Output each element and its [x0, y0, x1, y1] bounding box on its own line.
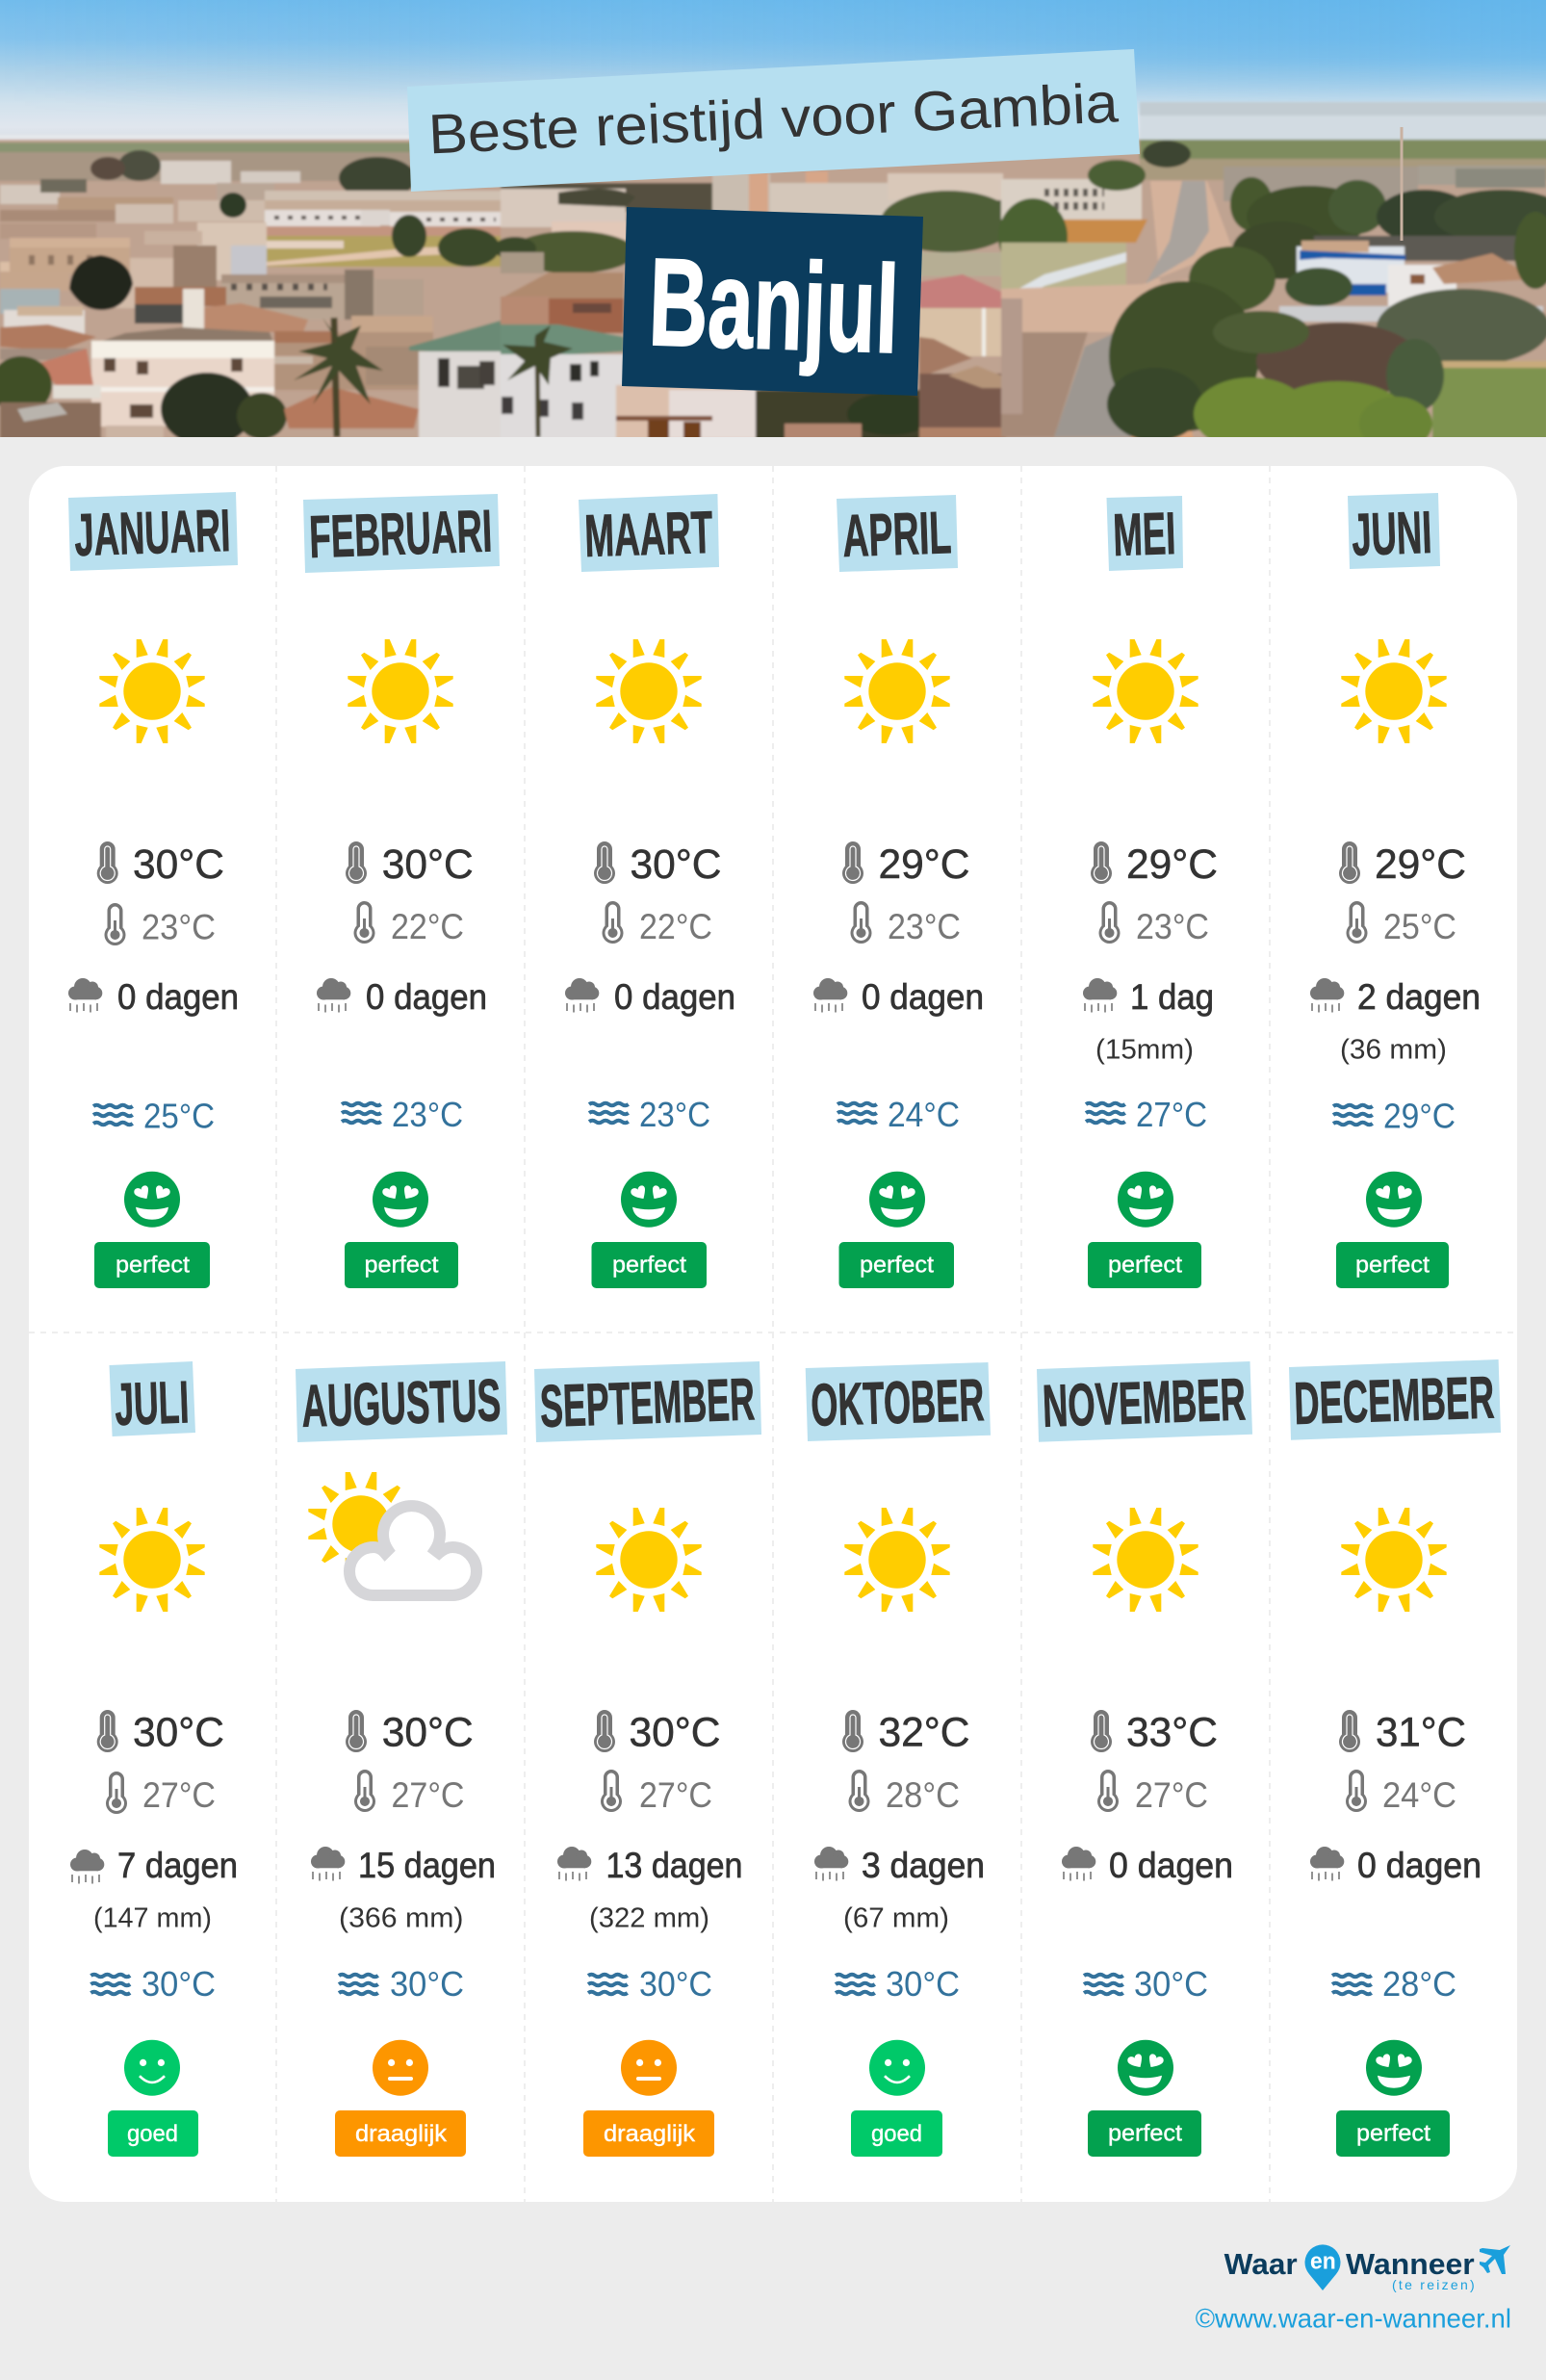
- sea temperature: 29°C: [1383, 1097, 1456, 1136]
- month tag: [1348, 493, 1440, 569]
- max temperature: 29°C: [878, 841, 970, 888]
- rating badge: [94, 1242, 210, 1288]
- min temperature: [1346, 1770, 1456, 1815]
- icon: perfect face: [373, 1172, 428, 1228]
- rain days: 0 dagen: [366, 977, 487, 1017]
- month tag: APRIL: [841, 500, 952, 570]
- rain days: [557, 1846, 743, 1885]
- min temperature: 27°C: [391, 1775, 464, 1815]
- rating badge: perfect: [612, 1253, 686, 1279]
- rating badge: [1088, 2110, 1201, 2157]
- sea temperature: 23°C: [392, 1095, 463, 1134]
- icon: perfect face: [1366, 1172, 1422, 1228]
- month tag: [534, 1361, 761, 1442]
- icon: perfect face: [869, 1172, 925, 1228]
- title banner: Beste reistijd voor Gambia: [427, 71, 1121, 166]
- min temperature: [354, 1770, 464, 1815]
- sea temperature: [90, 1964, 216, 2004]
- icon: sun: [1341, 1508, 1447, 1612]
- month tag: [110, 1361, 195, 1438]
- sea temperature: 30°C: [390, 1964, 464, 2004]
- icon: sun: [596, 639, 702, 743]
- month tag: AUGUSTUS: [300, 1367, 502, 1440]
- rain days: 0 dagen: [117, 977, 239, 1017]
- month tag: [1107, 496, 1183, 571]
- icon: perfect face: [1366, 2040, 1422, 2096]
- min temperature: [1097, 1770, 1208, 1815]
- icon: perfect face: [621, 1172, 677, 1228]
- panel: januari: [68, 492, 239, 1288]
- rainfall amount: (147 mm): [93, 1903, 212, 1934]
- sea temperature: 25°C: [143, 1097, 215, 1136]
- rating badge: [345, 1242, 458, 1288]
- rain days: [317, 977, 487, 1017]
- min temperature: 23°C: [888, 907, 961, 946]
- max temperature: 30°C: [630, 1710, 720, 1756]
- rainfall amount: (36 mm): [1340, 1035, 1447, 1066]
- max temperature: 30°C: [133, 841, 224, 888]
- month tag: [806, 1362, 991, 1441]
- sea temperature: 30°C: [142, 1964, 216, 2004]
- month tag: MEI: [1112, 501, 1176, 569]
- rain days: 3 dagen: [862, 1846, 985, 1885]
- icon: neutral face: [373, 2040, 428, 2096]
- sea temperature: 30°C: [886, 1964, 960, 2004]
- month tag: [68, 492, 238, 571]
- panel: maart: [565, 494, 735, 1288]
- max temperature: 29°C: [1375, 841, 1466, 888]
- min temperature: [601, 1770, 712, 1815]
- panel: mei: [1083, 496, 1218, 1288]
- max temperature: 31°C: [1376, 1710, 1466, 1756]
- sea temperature: [589, 1095, 710, 1134]
- right: [1001, 179, 1142, 220]
- rating badge: goed: [127, 2121, 178, 2147]
- min temperature: 22°C: [391, 907, 464, 946]
- rating badge: goed: [871, 2121, 922, 2147]
- icon: good face: [124, 2040, 180, 2096]
- month tag: [1037, 1361, 1252, 1442]
- sea temperature: 24°C: [888, 1095, 960, 1134]
- icon: sun: [348, 639, 453, 743]
- month tag: JULI: [114, 1369, 190, 1438]
- sea temperature: [1333, 1097, 1456, 1136]
- rating badge: draaglijk: [355, 2121, 448, 2147]
- panel: juli: [70, 1361, 238, 2157]
- min temperature: 22°C: [639, 907, 712, 946]
- rain days: [565, 977, 735, 1017]
- min temperature: [1346, 901, 1456, 946]
- icon: sun: [99, 1508, 205, 1612]
- rating badge: draaglijk: [604, 2121, 696, 2147]
- rainfall amount: (67 mm): [843, 1903, 949, 1934]
- rain days: 0 dagen: [862, 977, 984, 1017]
- sea temperature: 28°C: [1382, 1964, 1456, 2004]
- rating badge: perfect: [1355, 1253, 1430, 1279]
- sea temperature: [837, 1095, 960, 1134]
- min temperature: [354, 901, 464, 946]
- icon: map pin: [1305, 2244, 1340, 2290]
- sea temperature: 30°C: [1134, 1964, 1208, 2004]
- rating badge: perfect: [860, 1253, 934, 1279]
- city label: Banjul: Banjul: [647, 233, 901, 379]
- max temperature: 30°C: [382, 841, 474, 888]
- rating badge: perfect: [1108, 2121, 1182, 2147]
- icon: sun: [844, 1508, 950, 1612]
- sea temperature: [342, 1095, 463, 1134]
- icon: sun: [1093, 639, 1198, 743]
- month tag: [303, 494, 500, 573]
- rain days: 7 dagen: [117, 1846, 238, 1885]
- rain days: 15 dagen: [358, 1846, 496, 1885]
- sea temperature: [588, 1964, 712, 2004]
- rain days: 0 dagen: [1109, 1846, 1233, 1885]
- panel: juni: [1310, 493, 1481, 1288]
- max temperature: 30°C: [382, 1710, 474, 1756]
- rain days: 0 dagen: [1357, 1846, 1482, 1885]
- min temperature: [106, 1772, 216, 1815]
- rating badge: [851, 2110, 942, 2157]
- max temperature: 30°C: [630, 841, 722, 888]
- sea temperature: 30°C: [639, 1964, 712, 2004]
- panel: oktober: [806, 1362, 991, 2157]
- month tag: OKTOBER: [810, 1367, 985, 1439]
- city label: Banjul: [622, 207, 923, 396]
- rating badge: perfect: [1356, 2121, 1430, 2147]
- rating badge: [1336, 1242, 1449, 1288]
- rain days: 2 dagen: [1357, 977, 1481, 1017]
- sea temperature: [339, 1964, 464, 2004]
- rating badge: [839, 1242, 954, 1288]
- icon: sun: [596, 1508, 702, 1612]
- month tag: FEBRUARI: [308, 498, 493, 571]
- icon: good face: [869, 2040, 925, 2096]
- rainfall amount: (322 mm): [589, 1903, 709, 1934]
- icon: airplane: [1480, 2245, 1510, 2274]
- rain days: [1083, 977, 1214, 1017]
- rating badge: [1336, 2110, 1450, 2157]
- logo: Waar en Wanneer: [1224, 2244, 1510, 2292]
- sea temperature: 23°C: [639, 1095, 710, 1134]
- max temperature: 33°C: [1126, 1710, 1218, 1756]
- rain days: [68, 977, 239, 1017]
- icon: perfect face: [1118, 2040, 1173, 2096]
- panel: augustus: [296, 1361, 507, 2157]
- min temperature: [1099, 901, 1209, 946]
- rain days: 1 dag: [1130, 977, 1214, 1017]
- month tag: [579, 494, 719, 572]
- icon: perfect face: [1118, 1172, 1173, 1228]
- max temperature: 30°C: [133, 1710, 224, 1756]
- month tag: [837, 495, 958, 572]
- website credit: ©www.waar-en-wanneer.nl: [1196, 2304, 1511, 2334]
- rainfall amount: (15mm): [1095, 1035, 1194, 1066]
- month tag: SEPTEMBER: [539, 1366, 756, 1440]
- panel: september: [534, 1361, 761, 2157]
- rating badge: [108, 2110, 198, 2157]
- rain days: 0 dagen: [614, 977, 735, 1017]
- rating badge: [335, 2110, 466, 2157]
- sea temperature: [1332, 1964, 1456, 2004]
- sea temperature: [93, 1097, 215, 1136]
- rating badge: perfect: [364, 1253, 439, 1279]
- icon: sun: [1341, 639, 1447, 743]
- icon: neutral face: [621, 2040, 677, 2096]
- min temperature: 24°C: [1382, 1775, 1456, 1815]
- month tag: NOVEMBER: [1042, 1366, 1247, 1440]
- logo: Waar en Wanneer: Wanneer: [1346, 2247, 1475, 2281]
- sea temperature: 27°C: [1136, 1095, 1207, 1134]
- min temperature: 23°C: [1136, 907, 1209, 946]
- month tag: MAART: [583, 500, 713, 570]
- min temperature: [603, 901, 712, 946]
- min temperature: [851, 901, 961, 946]
- icon: perfect face: [124, 1172, 180, 1228]
- rainfall amount: (366 mm): [339, 1903, 464, 1934]
- min temperature: [849, 1770, 960, 1815]
- logo: Waar en Wanneer: Waar: [1224, 2247, 1298, 2281]
- sea temperature: [1084, 1964, 1208, 2004]
- icon: sun: [99, 639, 205, 743]
- min temperature: 27°C: [142, 1775, 216, 1815]
- rating badge: [583, 2110, 714, 2157]
- icon: sun: [1093, 1508, 1198, 1612]
- max temperature: 29°C: [1126, 841, 1218, 888]
- right of title card: [888, 173, 1003, 200]
- rain days: [813, 977, 984, 1017]
- min temperature: 27°C: [639, 1775, 712, 1815]
- rating badge: perfect: [116, 1253, 190, 1279]
- min temperature: 28°C: [886, 1775, 960, 1815]
- panel: februari: [303, 494, 500, 1288]
- sea temperature: [836, 1964, 960, 2004]
- icon: map pin: en: [1310, 2249, 1336, 2275]
- month tag: [296, 1361, 507, 1442]
- icon: sun behind cloud: [308, 1472, 477, 1595]
- panel: april: [813, 495, 984, 1288]
- panel: november: [1037, 1361, 1252, 2157]
- header photo: Banjul skyline: [0, 0, 1546, 451]
- left town: [337, 156, 411, 193]
- panel: climate table card: [29, 466, 1517, 2202]
- min temperature: 23°C: [142, 908, 216, 947]
- sea temperature: [1086, 1095, 1207, 1134]
- max temperature: 32°C: [878, 1710, 970, 1756]
- month tag: JANUARI: [73, 498, 231, 569]
- rain days: [70, 1846, 238, 1885]
- title banner: [407, 49, 1140, 192]
- rating badge: perfect: [1108, 1253, 1182, 1279]
- month tag: JUNI: [1351, 500, 1432, 569]
- icon: sun: [844, 639, 950, 743]
- centre: [501, 189, 626, 227]
- rain days: 13 dagen: [606, 1846, 743, 1885]
- min temperature: [104, 903, 216, 947]
- min temperature: 25°C: [1383, 907, 1456, 946]
- panel: december: [1289, 1359, 1501, 2157]
- min temperature: 27°C: [1135, 1775, 1208, 1815]
- logo: Waar en Wanneer: (te reizen): [1392, 2277, 1475, 2292]
- rating badge: [1088, 1242, 1201, 1288]
- rating badge: [591, 1242, 707, 1288]
